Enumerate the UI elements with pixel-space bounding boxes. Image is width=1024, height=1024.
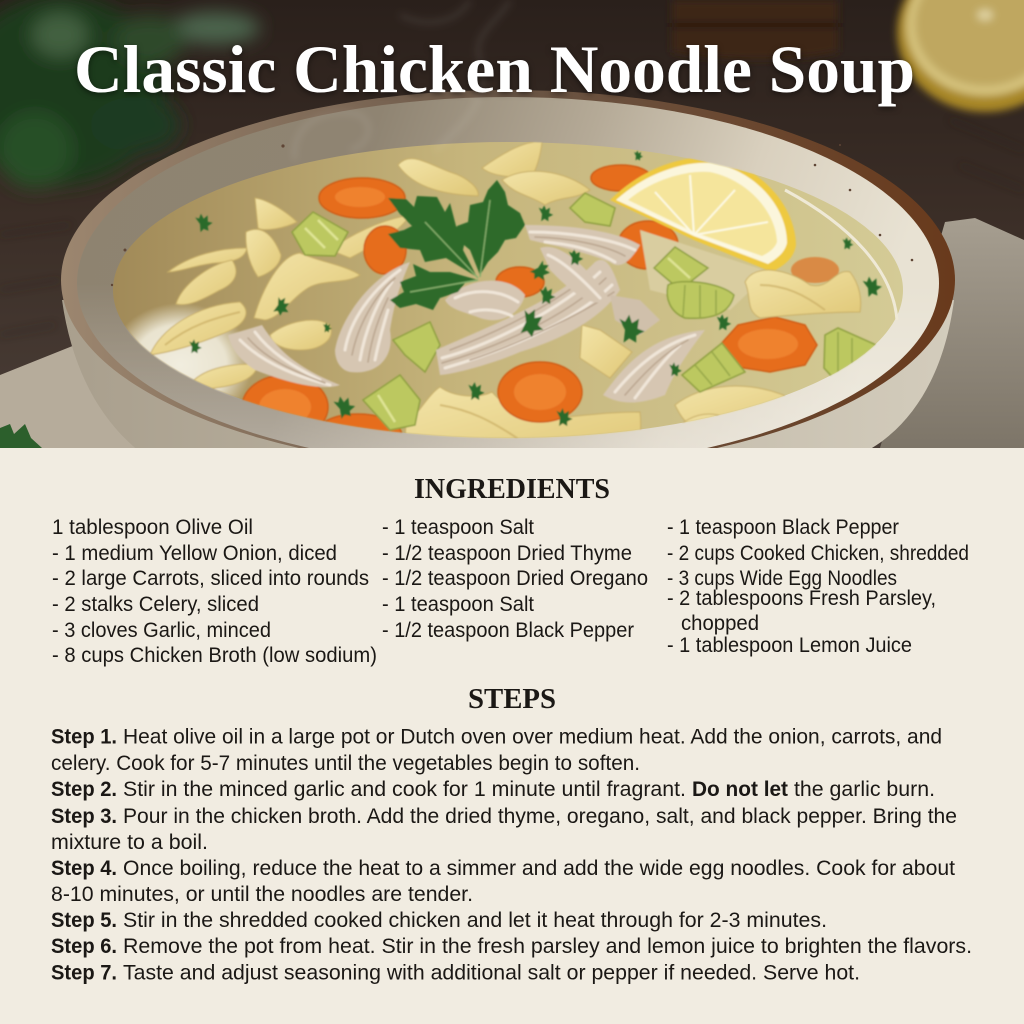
ingredients column 3: - 2 tablespoons Fresh Parsley, xyxy=(667,587,936,610)
ingredients column 1: - 2 large Carrots, sliced into rounds xyxy=(52,567,369,590)
small parsley sprig, bottom left xyxy=(0,424,42,448)
steam wisps xyxy=(404,4,508,88)
lighter lower wall xyxy=(84,315,910,448)
bowl outside xyxy=(62,300,954,452)
heading: ingredients: INGREDIENTS xyxy=(414,473,610,505)
steps text: Pour in the chicken broth. Add the dried thyme, oregano, salt, and black pepper. Bring the xyxy=(123,805,957,828)
ingredients column 2: - 1 teaspoon Salt xyxy=(382,516,534,539)
blurred parsley, top left xyxy=(0,0,260,188)
ingredients column 3: - 1 tablespoon Lemon Juice xyxy=(667,634,912,657)
parsley garnish xyxy=(388,180,525,310)
steps text: Step 5. xyxy=(51,909,117,932)
bowl inner wall xyxy=(77,97,939,469)
wood grain xyxy=(0,120,1024,335)
steps text: the garlic burn. xyxy=(794,778,935,801)
ingredients column 2: - 1/2 teaspoon Black Pepper xyxy=(382,619,634,642)
steps text: Taste and adjust seasoning with additional salt or pepper if needed. Serve hot. xyxy=(123,962,860,984)
steps text: celery. Cook for 5-7 minutes until the vegetables begin to soften. xyxy=(51,752,640,775)
ingredients column 1: - 3 cloves Garlic, minced xyxy=(52,619,271,642)
steps text: Remove the pot from heat. Stir in the fresh parsley and lemon juice to brighten the flavors. xyxy=(123,935,972,958)
ingredients column 1: - 1 medium Yellow Onion, diced xyxy=(52,542,337,565)
blurred pepper mill xyxy=(672,0,838,60)
parsley flecks xyxy=(189,150,892,426)
back noodles xyxy=(150,142,641,455)
ingredients column 1 xyxy=(52,516,377,667)
ingredients column 1: - 2 stalks Celery, sliced xyxy=(52,593,259,616)
soup contents xyxy=(108,142,892,458)
steps text: Stir in the minced garlic and cook for 1 minute until fragrant. xyxy=(123,778,686,801)
linen napkin, right xyxy=(880,218,1024,448)
panel: recipe text xyxy=(0,448,1024,1024)
photo: bowl of chicken noodle soup xyxy=(0,0,1024,470)
steps text: Once boiling, reduce the heat to a simmer and add the wide egg noodles. Cook for about xyxy=(123,857,955,880)
ingredients column 2: - 1 teaspoon Salt xyxy=(382,593,534,616)
broth xyxy=(113,142,903,438)
shredded chicken xyxy=(228,225,705,402)
steps text: mixture to a boil. xyxy=(51,831,208,854)
blurred lemon half, top right xyxy=(897,0,1024,112)
submerged strands under lemon xyxy=(640,230,770,310)
steps text: Step 4. xyxy=(51,857,117,880)
ingredients column 2: - 1/2 teaspoon Dried Oregano xyxy=(382,567,648,590)
steps text: Step 1. xyxy=(51,726,117,748)
steps text: Step 3. xyxy=(51,805,117,828)
steps text: Stir in the shredded cooked chicken and let it heat through for 2-3 minutes. xyxy=(123,909,827,932)
ingredients column 2: - 1/2 teaspoon Dried Thyme xyxy=(382,542,632,565)
broth meniscus, right xyxy=(785,190,897,320)
steps text: Heat olive oil in a large pot or Dutch oven over medium heat. Add the onion, carrots, and xyxy=(123,726,942,748)
ingredients column 1: 1 tablespoon Olive Oil xyxy=(52,516,253,539)
title: Classic Chicken Noodle Soup xyxy=(74,31,915,107)
heading: steps: STEPS xyxy=(468,683,556,715)
bowl xyxy=(61,90,955,470)
steps text: Step 7. xyxy=(51,962,117,984)
speckles on bowl xyxy=(111,144,913,286)
steps text: 8-10 minutes, or until the noodles are tender. xyxy=(51,883,473,906)
right noodles xyxy=(580,269,862,424)
steps text: Step 2. xyxy=(51,778,117,801)
ingredients column 1: - 8 cups Chicken Broth (low sodium) xyxy=(52,644,377,667)
ingredients column 2 xyxy=(382,516,648,642)
celery pieces xyxy=(292,193,876,430)
wooden table background xyxy=(0,0,1024,448)
steps text: Step 6. xyxy=(51,935,117,958)
steps text xyxy=(51,726,972,984)
linen napkin, left xyxy=(0,345,140,448)
steps text: Do not let xyxy=(692,778,788,801)
bowl rim xyxy=(61,90,955,470)
carrot slices xyxy=(242,165,839,458)
ingredients column 3: - 3 cups Wide Egg Noodles xyxy=(667,567,897,590)
lemon slice xyxy=(610,158,796,272)
ingredients column 3 xyxy=(667,516,969,657)
ingredients column 3: chopped xyxy=(681,612,759,635)
ingredients column 3: - 1 teaspoon Black Pepper xyxy=(667,516,899,539)
milky highlight xyxy=(126,304,248,398)
ingredients column 3: - 2 cups Cooked Chicken, shredded xyxy=(667,542,969,565)
